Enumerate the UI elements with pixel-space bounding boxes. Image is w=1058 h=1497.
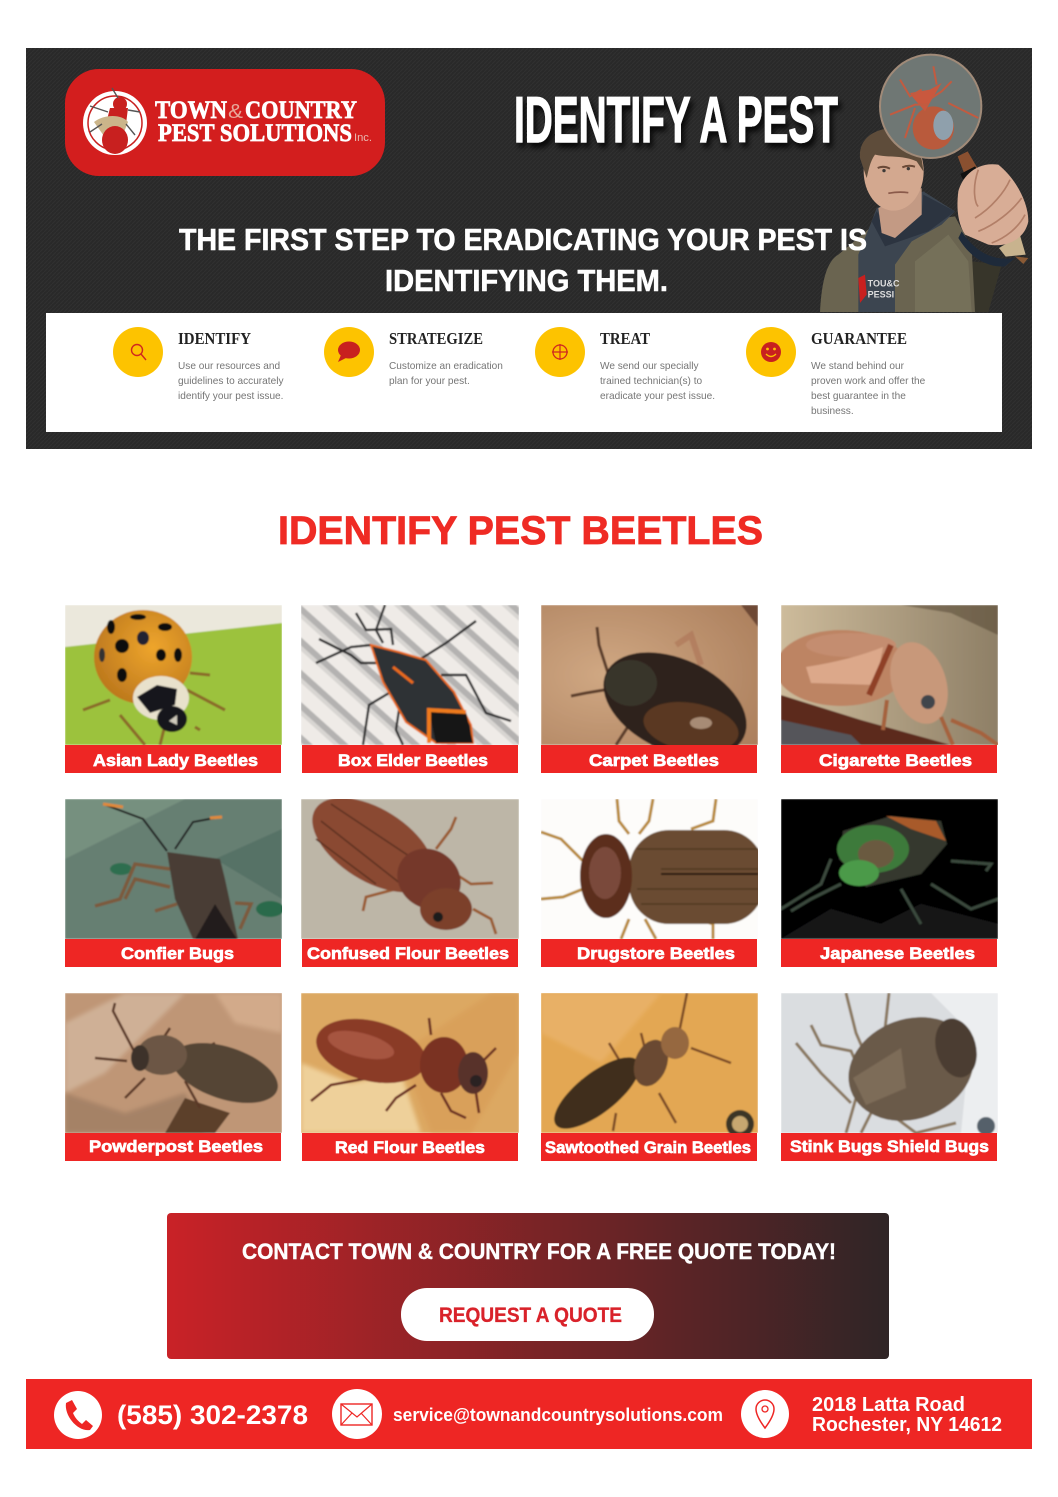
card: Red Flour Beetles: Red Flour Beetles xyxy=(335,1138,485,1157)
technician holding magnifier: PESSI xyxy=(868,289,894,299)
step: strategize: Customize an eradication xyxy=(389,361,503,372)
address xyxy=(741,1390,1002,1438)
call to action panel: CONTACT TOWN & COUNTRY FOR A FREE QUOTE TODAY! xyxy=(242,1239,836,1264)
panel: process steps xyxy=(46,313,1002,432)
card: Confused Flour Beetles: Confused Flour Beetles xyxy=(307,944,509,963)
step: treat: We send our specially xyxy=(600,361,700,372)
step: identify: IDENTIFY xyxy=(178,329,251,348)
headline: IDENTIFYING THEM. xyxy=(385,263,668,298)
card: Powderpost Beetles xyxy=(65,993,285,1161)
card: Red Flour Beetles xyxy=(301,993,519,1161)
card: Japanese Beetles xyxy=(781,799,998,967)
card: Japanese Beetles: Japanese Beetles xyxy=(820,944,975,963)
phone xyxy=(54,1391,308,1439)
step: strategize xyxy=(324,327,503,387)
card: Asian Lady Beetles xyxy=(65,605,282,773)
card: Box Elder Beetles: Box Elder Beetles xyxy=(338,751,488,770)
logo badge: TOWN xyxy=(155,97,227,124)
step: strategize: plan for your pest. xyxy=(389,376,470,387)
step: treat: eradicate your pest issue. xyxy=(600,391,715,402)
logo badge: PEST SOLUTIONS xyxy=(158,120,352,147)
button: request a quote xyxy=(401,1288,654,1341)
address: 2018 Latta Road xyxy=(812,1393,965,1416)
section heading: IDENTIFY PEST BEETLES xyxy=(278,509,763,553)
headline: THE FIRST STEP TO ERADICATING YOUR PEST IS xyxy=(179,222,867,257)
card: Cigarette Beetles xyxy=(775,605,998,773)
phone: (585) 302-2378 xyxy=(117,1400,308,1430)
step: treat: trained technician(s) to xyxy=(600,376,702,387)
address: Rochester, NY 14612 xyxy=(812,1413,1002,1436)
header panel xyxy=(26,48,1032,449)
email: service@townandcountrysolutions.com xyxy=(393,1405,723,1425)
logo badge xyxy=(65,69,385,176)
card: Carpet Beetles xyxy=(541,605,763,779)
button: request a quote: REQUEST A QUOTE xyxy=(439,1304,622,1327)
call to action panel xyxy=(167,1213,889,1359)
contact footer xyxy=(26,1379,1032,1449)
main title: IDENTIFY A PEST xyxy=(514,83,838,156)
step: guarantee: GUARANTEE xyxy=(811,329,907,348)
card: Confier Bugs xyxy=(65,799,284,967)
step: guarantee: best guarantee in the xyxy=(811,391,906,402)
card: Drugstore Beetles xyxy=(541,799,764,967)
card: Cigarette Beetles: Cigarette Beetles xyxy=(819,751,972,770)
step: treat: TREAT xyxy=(600,329,650,348)
card: Sawtoothed Grain Beetles: Sawtoothed Grain Beetles xyxy=(545,1138,751,1157)
headline xyxy=(179,222,867,298)
logo badge: COUNTRY xyxy=(245,97,357,124)
step: guarantee xyxy=(746,327,926,417)
step: treat xyxy=(535,327,715,402)
card: Stink Bugs Shield Bugs xyxy=(781,993,998,1161)
technician holding magnifier: TOU&C xyxy=(868,279,900,289)
step: identify xyxy=(113,327,284,402)
technician holding magnifier xyxy=(820,54,1028,312)
card: Asian Lady Beetles: Asian Lady Beetles xyxy=(93,751,258,770)
card: Box Elder Beetles xyxy=(301,605,519,773)
step: guarantee: proven work and offer the xyxy=(811,376,926,387)
card: Powderpost Beetles: Powderpost Beetles xyxy=(89,1137,263,1156)
logo badge: Inc. xyxy=(354,132,372,144)
logo badge: & xyxy=(228,101,244,123)
step: guarantee: business. xyxy=(811,406,854,417)
step: guarantee: We stand behind our xyxy=(811,361,905,372)
step: strategize: STRATEGIZE xyxy=(389,329,483,348)
card: Confused Flour Beetles xyxy=(296,778,519,967)
email xyxy=(332,1389,723,1439)
card: Drugstore Beetles: Drugstore Beetles xyxy=(577,944,735,963)
card: Stink Bugs Shield Bugs: Stink Bugs Shield Bugs xyxy=(790,1137,989,1156)
card: Sawtoothed Grain Beetles xyxy=(541,993,758,1161)
card: Confier Bugs: Confier Bugs xyxy=(121,944,234,963)
step: identify: guidelines to accurately xyxy=(178,376,284,387)
step: identify: Use our resources and xyxy=(178,361,280,372)
step: identify: identify your pest issue. xyxy=(178,391,283,402)
card: Carpet Beetles: Carpet Beetles xyxy=(589,751,719,770)
